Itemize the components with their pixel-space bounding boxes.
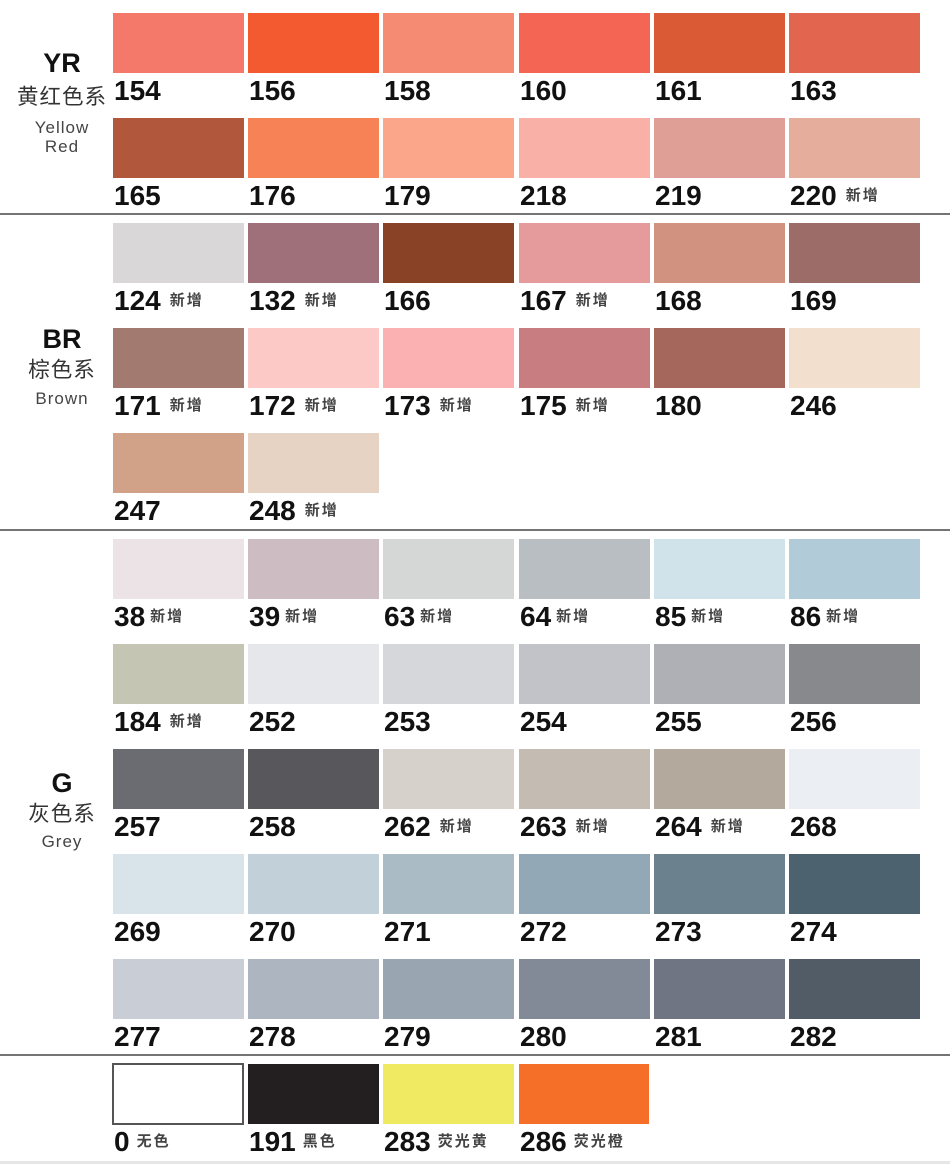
divider [0,529,950,531]
swatch 167 [519,223,650,316]
swatch 167: 167 新增 [520,285,610,316]
swatch 124: 124 新增 [114,285,204,316]
swatch 274: 274 [790,916,837,947]
swatch 63 [383,539,514,632]
swatch 173: 173 新增 [384,390,474,421]
swatch 286: 286 荧光橙 [520,1126,625,1157]
swatch 272 [519,854,654,944]
swatch 163: 163 [790,75,837,106]
swatch 179 [383,118,514,211]
group label: Grey [28,768,96,850]
swatch 254 [519,644,650,737]
swatch 277: 277 [114,1021,161,1052]
swatch 218: 218 [520,180,567,211]
swatch 269: 269 [114,916,161,947]
group label: Brown: Brown [35,388,89,408]
swatch 274 [789,854,924,944]
swatch 257: 257 [114,811,161,842]
swatch 160 [519,13,650,106]
swatch 247 [113,433,244,526]
swatch 273: 273 [655,916,702,947]
swatch 38: 38 新增 [114,601,184,632]
group label: Yellow Red: Yellow [35,118,89,137]
swatch 262: 262 新增 [384,811,474,842]
swatch 64 [519,539,650,632]
swatch 272: 272 [520,916,567,947]
swatch 0: 0 无色 [114,1126,171,1157]
swatch 191: 191 黑色 [249,1126,337,1157]
swatch 0 [112,1063,247,1153]
swatch 268 [789,749,924,839]
swatch 172 [248,328,379,421]
bottom edge band [0,1161,950,1164]
divider [0,213,950,215]
swatch 219: 219 [655,180,702,211]
swatch 283 [383,1064,518,1154]
swatch 171 [113,328,244,421]
swatch 246: 246 [790,390,837,421]
swatch 257 [113,749,248,839]
swatch 169 [789,223,920,316]
swatch 220: 220 新增 [790,180,880,211]
swatch 270 [248,854,383,944]
swatch 256: 256 [790,706,837,737]
swatch 255 [654,644,785,737]
swatch 220 [789,118,920,211]
swatch 247: 247 [114,495,161,526]
group label: Brown [28,324,96,408]
swatch 264: 264 新增 [655,811,745,842]
swatch 277 [113,959,248,1049]
swatch 256 [789,644,924,734]
swatch 191 [248,1064,383,1154]
swatch 171: 171 新增 [114,390,204,421]
swatch 86: 86 新增 [790,601,860,632]
swatch 175 [519,328,650,421]
swatch 64: 64 新增 [520,601,590,632]
swatch 278 [248,959,383,1049]
group label: Yellow Red: Red [45,137,79,156]
swatch 169: 169 [790,285,837,316]
swatch 160: 160 [520,75,567,106]
swatch 263 [519,749,654,839]
swatch 281: 281 [655,1021,702,1052]
swatch 184: 184 新增 [114,706,204,737]
swatch 269 [113,854,248,944]
swatch 286 [519,1064,654,1154]
swatch 218 [519,118,650,211]
group label: Brown: BR [42,324,82,354]
swatch 168 [654,223,785,316]
swatch 154: 154 [114,75,161,106]
swatch 280: 280 [520,1021,567,1052]
swatch 85 [654,539,785,632]
swatch 166 [383,223,514,316]
group label: Grey: 灰色系 [28,802,96,826]
swatch 85: 85 新增 [655,601,725,632]
swatch 282 [789,959,924,1049]
swatch 253 [383,644,514,737]
swatch 179: 179 [384,180,431,211]
swatch 279 [383,959,518,1049]
swatch 273 [654,854,789,944]
swatch 175: 175 新增 [520,390,610,421]
swatch 38 [113,539,244,632]
swatch 156: 156 [249,75,296,106]
swatch 264 [654,749,789,839]
swatch 252: 252 [249,706,296,737]
swatch 158 [383,13,514,106]
swatch 262 [383,749,518,839]
swatch 168: 168 [655,285,702,316]
swatch 258 [248,749,383,839]
swatch 271 [383,854,518,944]
group label: Yellow Red: 黄红色系 [17,85,107,109]
swatch 173 [383,328,514,421]
swatch 172: 172 新增 [249,390,339,421]
swatch 124 [113,223,244,316]
swatch 255: 255 [655,706,702,737]
swatch 281 [654,959,789,1049]
swatch 263: 263 新增 [520,811,610,842]
swatch 154 [113,13,244,106]
swatch 86 [789,539,920,632]
swatch 270: 270 [249,916,296,947]
swatch 165: 165 [114,180,161,211]
swatch 176: 176 [249,180,296,211]
swatch 165 [113,118,244,211]
group label: Grey: G [51,768,72,798]
swatch 271: 271 [384,916,431,947]
swatch 278: 278 [249,1021,296,1052]
swatch 166: 166 [384,285,431,316]
swatch 248 [248,433,379,526]
swatch 184 [113,644,244,737]
swatch 163 [789,13,920,106]
swatch 161 [654,13,785,106]
swatch 252 [248,644,379,737]
swatch 39: 39 新增 [249,601,319,632]
swatch 176 [248,118,379,211]
swatch 254: 254 [520,706,567,737]
swatch 132: 132 新增 [249,285,339,316]
swatch 180 [654,328,785,421]
swatch 246 [789,328,920,421]
swatch 268: 268 [790,811,837,842]
swatch 258: 258 [249,811,296,842]
swatch 248: 248 新增 [249,495,339,526]
divider [0,1054,950,1056]
swatch 219 [654,118,785,211]
swatch 180: 180 [655,390,702,421]
group label: Yellow Red [17,48,107,156]
swatch 63: 63 新增 [384,601,454,632]
swatch 280 [519,959,654,1049]
swatch 156 [248,13,379,106]
group label: Brown: 棕色系 [28,358,96,382]
swatch 39 [248,539,379,632]
swatch 253: 253 [384,706,431,737]
swatch 132 [248,223,379,316]
swatch 158: 158 [384,75,431,106]
swatch 279: 279 [384,1021,431,1052]
group label: Grey: Grey [42,832,82,850]
swatch 161: 161 [655,75,702,106]
group label: Yellow Red: YR [43,48,81,78]
swatch 283: 283 荧光黄 [384,1126,489,1157]
swatch 282: 282 [790,1021,837,1052]
